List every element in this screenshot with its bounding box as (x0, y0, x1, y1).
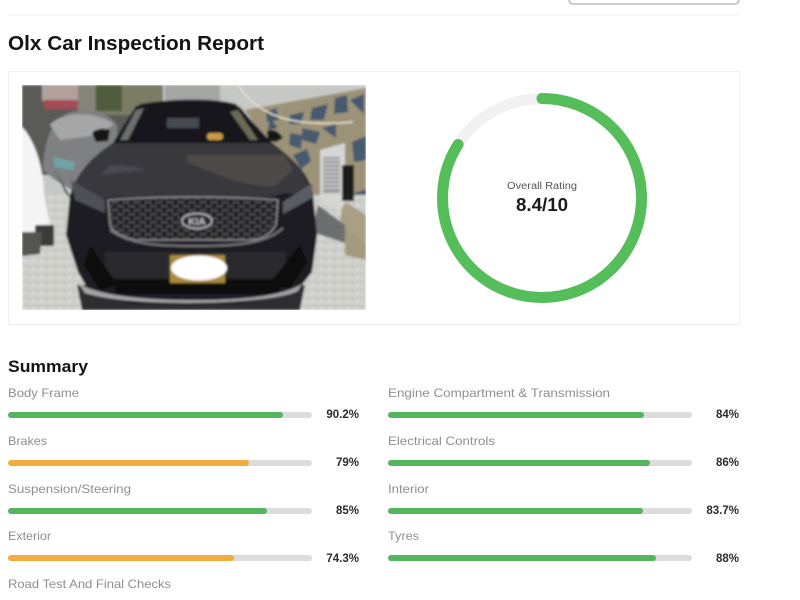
row: interior: Interior (388, 482, 429, 496)
row: exterior (8, 529, 359, 565)
lower bumper (105, 252, 285, 278)
row: brakes (8, 434, 359, 469)
row: exterior: Exterior (8, 529, 51, 543)
covered car (43, 110, 120, 195)
title: Olx Car Inspection Report (8, 32, 264, 55)
row: body frame: 90.2% (326, 409, 359, 421)
row: tyres: Tyres (388, 529, 419, 543)
row: suspension: Suspension/Steering (8, 482, 131, 496)
grille (108, 197, 278, 240)
car shadow (77, 285, 305, 310)
row: suspension (8, 482, 359, 517)
row: exterior: 74.3% (326, 553, 359, 565)
row: engine (388, 386, 739, 421)
row: brakes: 79% (336, 457, 359, 469)
row: road test: Road Test And Final Checks (8, 577, 171, 591)
headlights (71, 180, 105, 213)
row: body frame (8, 386, 359, 421)
ground gravel (22, 195, 366, 310)
rating ring: Overall Rating (507, 181, 577, 192)
number plate (170, 255, 225, 283)
row: suspension: 85% (336, 505, 359, 517)
row: interior: 83.7% (706, 505, 739, 517)
heading: summary: Summary (8, 358, 89, 376)
windshield (115, 104, 254, 142)
kia badge: KIA (188, 217, 206, 228)
hood (73, 143, 310, 200)
car photo (22, 85, 366, 310)
white car (22, 127, 50, 232)
row: engine: 84% (716, 409, 739, 421)
row: brakes: Brakes (8, 434, 47, 448)
row: electrical: 86% (716, 457, 739, 469)
row: tyres (388, 529, 739, 565)
top button fragment (569, 0, 739, 4)
cooler (320, 143, 345, 212)
panel: overview card (8, 72, 740, 324)
row: electrical: Electrical Controls (388, 434, 495, 448)
mirrors (92, 129, 110, 142)
row: engine: Engine Compartment & Transmission (388, 386, 610, 400)
car body (66, 100, 317, 304)
rating ring (442, 98, 642, 298)
row: body frame: Body Frame (8, 386, 79, 400)
row: interior (388, 482, 739, 517)
row: electrical (388, 434, 739, 469)
kia badge (182, 214, 212, 228)
rating ring: 8.4/10 (516, 195, 568, 215)
row: tyres: 88% (716, 553, 739, 565)
